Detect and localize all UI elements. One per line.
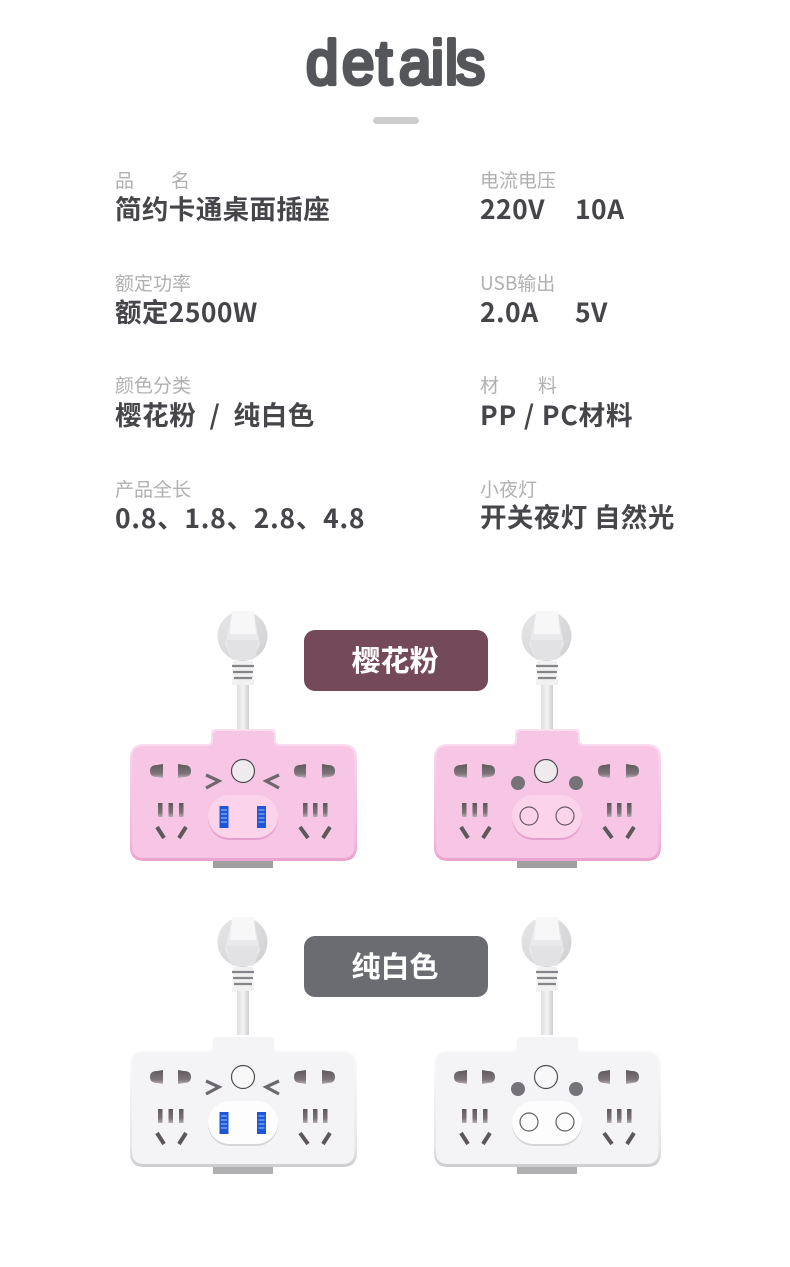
socket body <box>130 729 357 861</box>
colour badge: pink: 樱花粉 <box>351 638 439 680</box>
socket body <box>434 1035 661 1167</box>
bottom tab <box>517 860 577 868</box>
spec: rated power: 额定2500W <box>115 291 258 330</box>
socket body <box>434 729 661 861</box>
socket body <box>130 1035 357 1167</box>
nose with round ports <box>512 1101 582 1146</box>
switch button <box>232 760 254 782</box>
spec: material <box>480 371 633 433</box>
spec: current and voltage <box>480 166 624 227</box>
eye arrows <box>206 775 279 788</box>
spec: product length: 产品全长 <box>115 475 191 502</box>
colour badge: white <box>304 936 488 997</box>
spec: colour options <box>115 371 315 433</box>
spec: product name: 简约卡通桌面插座 <box>115 188 330 227</box>
switch button <box>232 1066 254 1088</box>
spec: USB output: 5V <box>575 291 608 330</box>
power plug <box>218 917 268 1036</box>
outlet holes <box>150 1070 335 1144</box>
device: pink with USB <box>130 611 357 868</box>
spec: product name: 品名 <box>115 166 227 193</box>
spec: product name <box>115 166 330 227</box>
title underline <box>373 117 419 124</box>
spec: current and voltage: 电流电压 <box>480 166 556 193</box>
spec: colour options: 颜色分类 <box>115 371 191 398</box>
spec: night light: 小夜灯 <box>480 475 537 502</box>
title: details <box>306 28 485 97</box>
colour badge: pink <box>304 630 488 691</box>
power plug <box>218 611 268 730</box>
spec: product length <box>115 475 365 536</box>
device: pink with sockets <box>434 611 661 868</box>
spec: USB output: USB输出 <box>480 269 555 296</box>
spec: current and voltage: 220V <box>480 188 545 227</box>
bottom tab <box>213 1166 273 1174</box>
outlet holes <box>454 764 639 838</box>
device: white with USB <box>130 917 357 1174</box>
spec: product length: 0.8、1.8、2.8、4.8 <box>115 497 365 536</box>
bottom tab <box>517 1166 577 1174</box>
spec: rated power <box>115 269 258 330</box>
outlet holes <box>454 1070 639 1144</box>
spec: rated power: 额定功率 <box>115 269 191 296</box>
power plug <box>522 611 572 730</box>
outlet holes <box>150 764 335 838</box>
device: white with sockets <box>434 917 661 1174</box>
spec: night light: 开关夜灯 自然光 <box>480 496 675 535</box>
nose with round ports <box>512 795 582 840</box>
spec: colour options: 樱花粉 / 纯白色 <box>115 394 315 433</box>
eye arrows <box>206 1081 279 1094</box>
spec: USB output <box>480 269 608 330</box>
spec: material: PP / PC材料 <box>480 394 633 433</box>
switch button <box>534 760 558 782</box>
spec: night light <box>480 475 675 535</box>
bottom tab <box>213 860 273 868</box>
colour badge: white: 纯白色 <box>351 944 439 986</box>
eye dots <box>511 1082 583 1096</box>
switch button <box>534 1066 558 1088</box>
nose with USB ports <box>208 1101 278 1146</box>
spec: current and voltage: 10A <box>575 188 624 227</box>
power plug <box>522 917 572 1036</box>
spec: material: 材料 <box>480 371 596 398</box>
nose with USB ports <box>208 795 278 840</box>
spec: USB output: 2.0A <box>480 291 538 330</box>
eye dots <box>511 776 583 790</box>
